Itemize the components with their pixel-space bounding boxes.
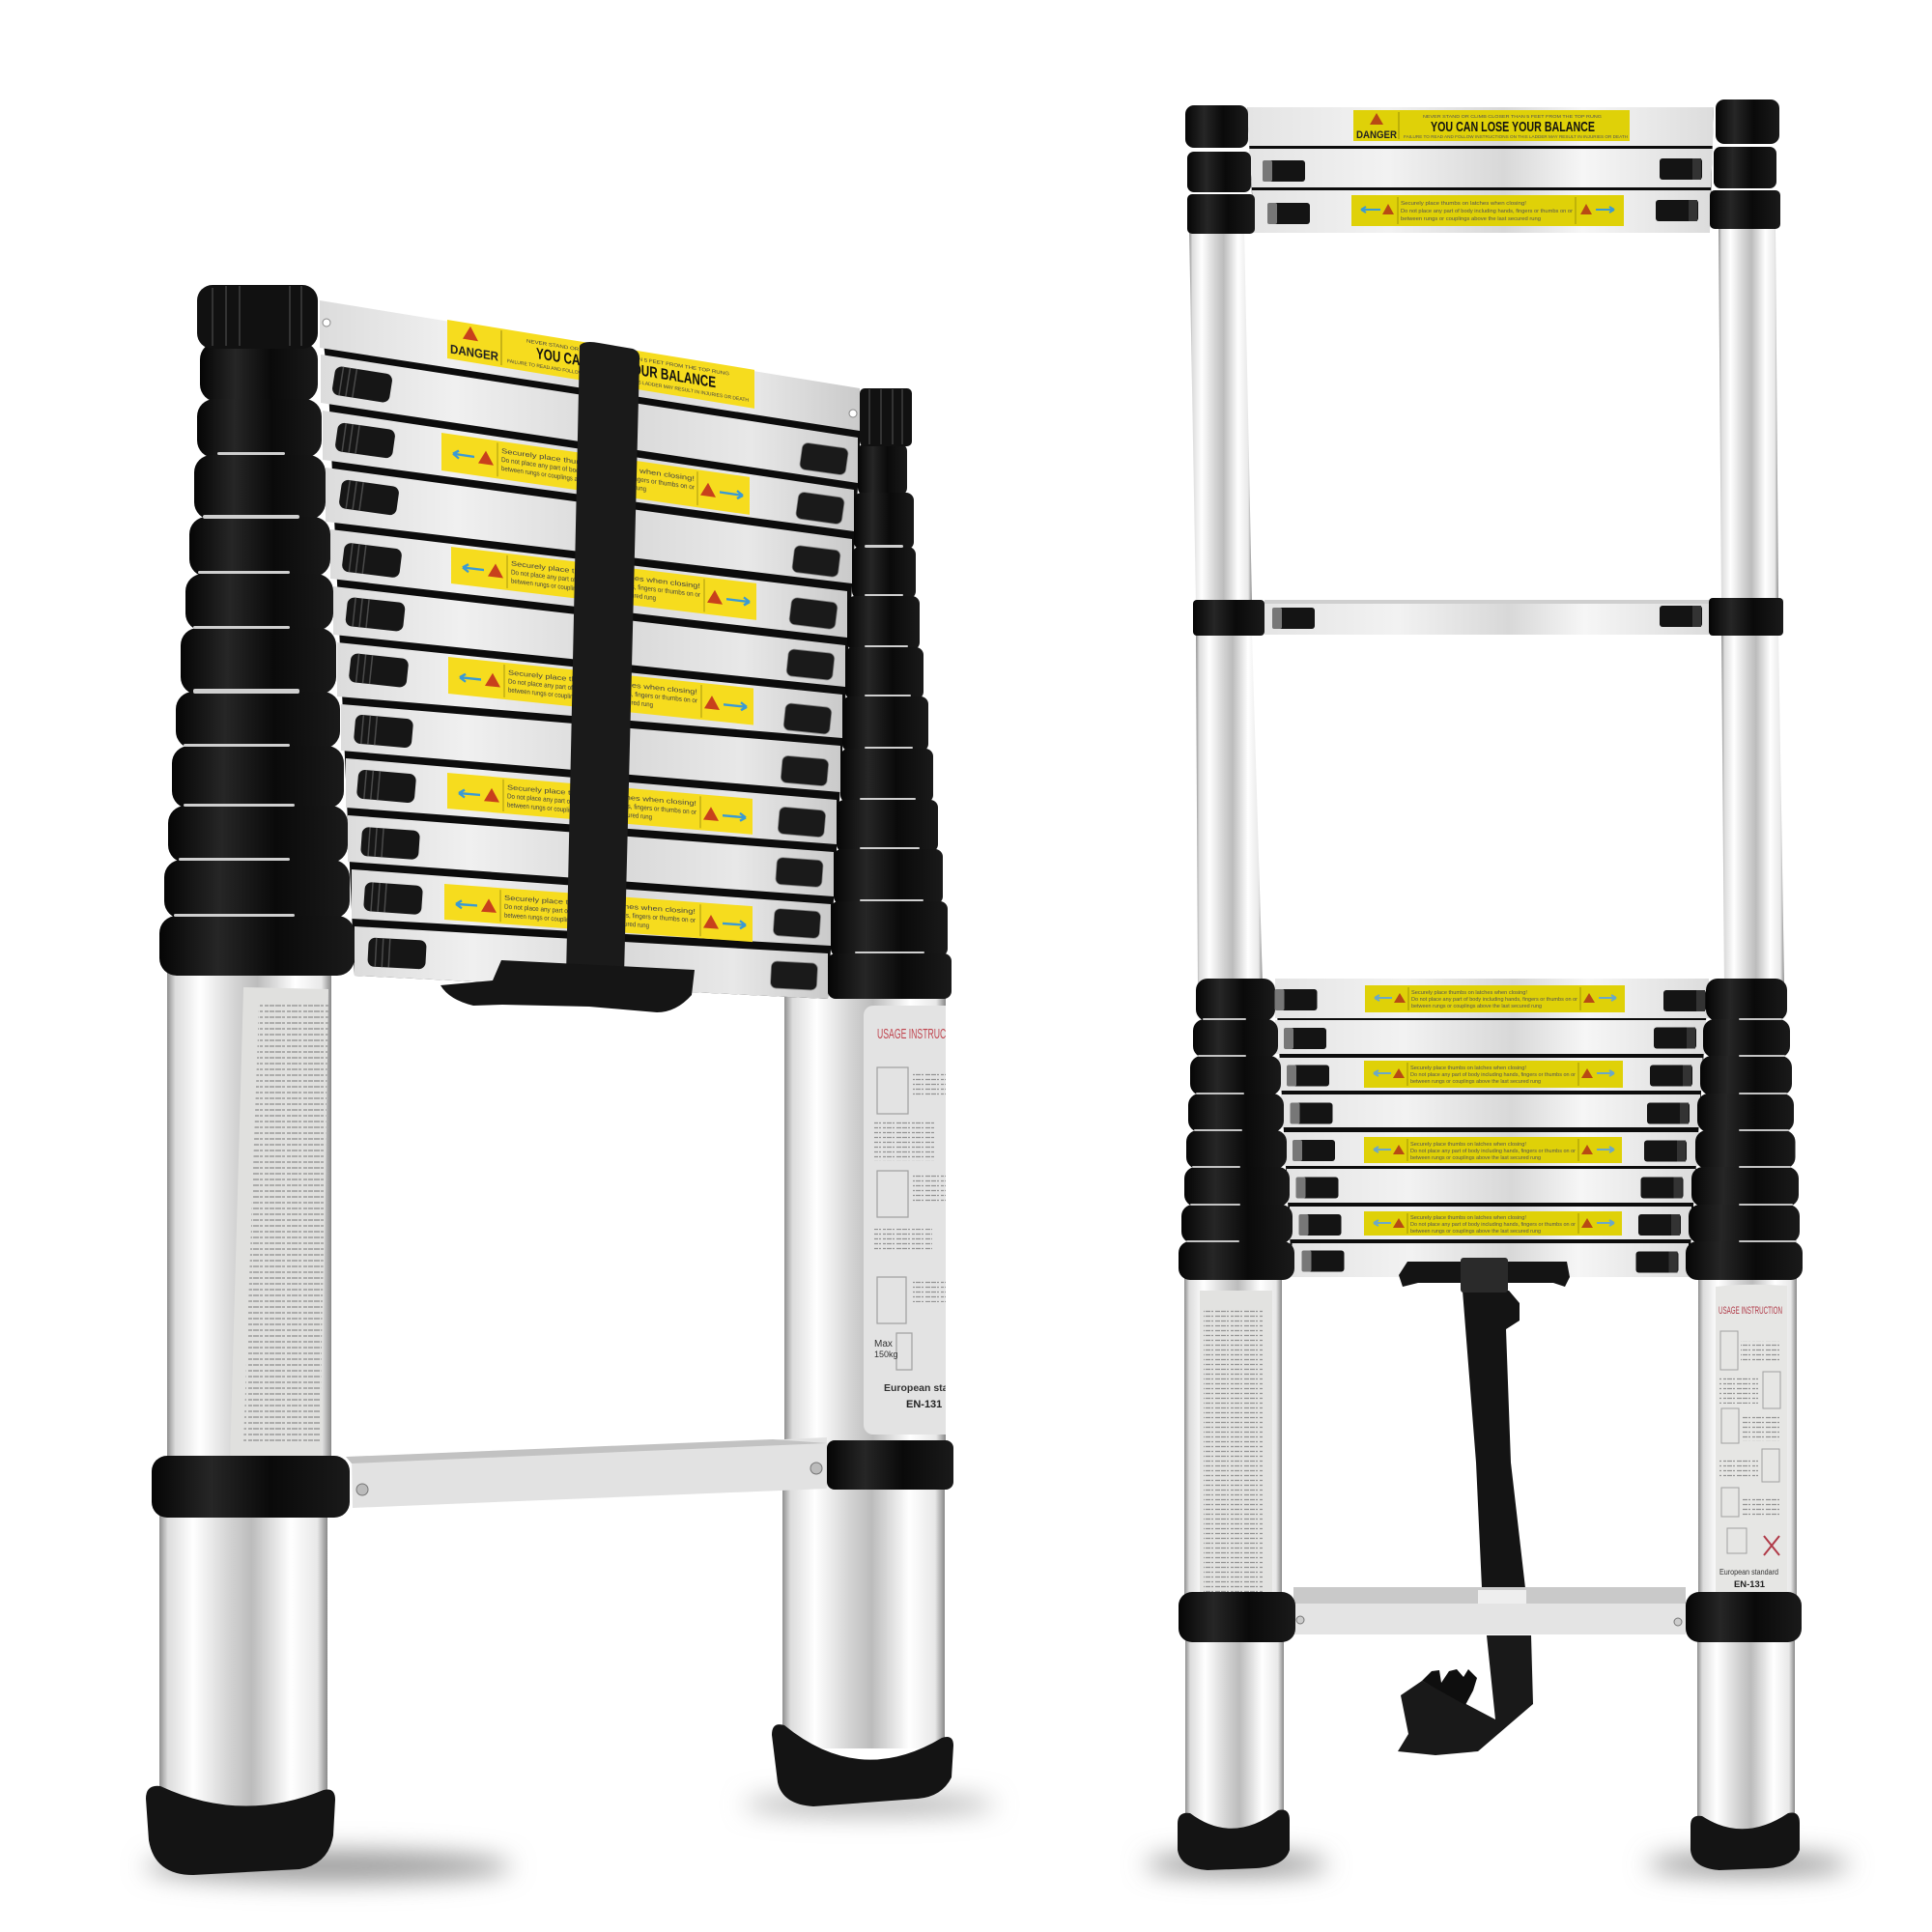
- left ladder: danger label: NEVER STAND OR CLIMB CLOSER THAN 5 FEET FROM THE TOP RUNG: [526, 338, 729, 378]
- left ladder: velcro strap: [566, 342, 639, 976]
- left ladder: caution label 2: between rungs or couplings above the last secured rung: [511, 578, 656, 602]
- right sticker small print: [1719, 1341, 1779, 1517]
- left ladder: left collars: [159, 342, 355, 976]
- left ladder: danger label: [447, 320, 754, 409]
- left ladder: caution label 5: Do not place any part of body including hands, fingers or thumbs on or: [504, 904, 696, 924]
- right ladder: lower stack rungs: [1275, 979, 1709, 1277]
- left ladder: caution label 5: [444, 884, 753, 942]
- right ladder: danger label: NEVER STAND OR CLIMB CLOSER THAN 5 FEET FROM THE TOP RUNG: [1423, 114, 1603, 119]
- right ladder: top collars: [1185, 99, 1780, 234]
- right ladder: lower stack right collars: [1686, 979, 1803, 1280]
- right ladder: lower caution label 4: between rungs or couplings above the last secured rung: [1410, 1229, 1541, 1235]
- right ladder: top caution label: Securely place thumbs on latches when closing!: [1401, 201, 1527, 207]
- sticker standard: European standard: [884, 1382, 977, 1394]
- right ladder: top stack backing: [1247, 107, 1714, 229]
- right sticker standard: European standard: [1719, 1568, 1778, 1577]
- left ladder: caution label 5: Securely place thumbs on latches when closing!: [504, 895, 696, 916]
- right ladder: lower caution label 2: [1364, 1061, 1623, 1088]
- left ladder: danger label: DANGER: [450, 342, 498, 364]
- right ladder: lower caution label 1: Do not place any part of body including hands, fingers or thumbs on or: [1411, 997, 1577, 1003]
- left ladder: carry handle: [440, 960, 695, 1012]
- right ladder: lower stack left collars: [1179, 979, 1294, 1280]
- right ladder: lower caution label 1: Securely place thumbs on latches when closing!: [1411, 990, 1527, 996]
- left ladder: caution label 2: [451, 547, 756, 620]
- right ladder: top caution label: [1351, 195, 1624, 226]
- left ladder: caution label 1: Do not place any part of body including hands, fingers or thumbs on or: [501, 457, 696, 492]
- right ladder: lower caution label 3: between rungs or couplings above the last secured rung: [1410, 1155, 1541, 1161]
- right ladder: lower caution label 3: Securely place thumbs on latches when closing!: [1410, 1142, 1526, 1148]
- right sticker standard number: EN-131: [1734, 1579, 1765, 1589]
- left ladder: top rung screws: [323, 319, 857, 417]
- floor shadows: [145, 1795, 1850, 1882]
- right sticker diagrams: [1720, 1331, 1780, 1553]
- right ladder: lower caution label 2: Do not place any part of body including hands, fingers or thumbs on or: [1410, 1072, 1576, 1078]
- sticker max load value: 150kg: [874, 1350, 898, 1359]
- right ladder: strap buckle: [1422, 1669, 1477, 1705]
- right ladder: feet: [1178, 1809, 1800, 1870]
- right ladder: lower tubes: [1184, 1270, 1797, 1831]
- left ladder: lower collars: [152, 1440, 953, 1518]
- right ladder: strap lower section and fold: [1398, 1635, 1533, 1755]
- left ladder: lower step: [346, 1437, 827, 1508]
- right ladder: lower caution label 2: between rungs or couplings above the last secured rung: [1410, 1079, 1541, 1085]
- right ladder: danger label: [1353, 110, 1630, 141]
- left ladder: feet: [146, 1724, 953, 1875]
- left ladder: usage instruction sticker: [864, 1006, 946, 1435]
- right ladder: lower caution label 4: Securely place thumbs on latches when closing!: [1410, 1215, 1526, 1221]
- left ladder: caution label 2: Do not place any part of body including hands, fingers or thumbs on or: [511, 569, 701, 599]
- left ladder: caution label 2: Securely place thumbs on latches when closing!: [511, 560, 700, 590]
- right ladder: lower stack collar highlights: [1186, 1018, 1797, 1242]
- right ladder: right tube sticker: [1716, 1285, 1787, 1603]
- left ladder: right tube: [782, 985, 946, 1748]
- right ladder: strap upper section: [1463, 1291, 1525, 1588]
- left ladder: caution label 3: Do not place any part of body including hands, fingers or thumbs on or: [508, 678, 698, 705]
- right sticker heading: USAGE INSTRUCTION: [1719, 1305, 1782, 1317]
- right ladder: lower caution label 4: [1364, 1211, 1622, 1236]
- left ladder: left latches: [331, 365, 427, 970]
- left ladder: rungs: [320, 300, 860, 999]
- left ladder: caution label 5: between rungs or couplings above the last secured rung: [504, 913, 649, 929]
- right ladder: lower stack right latches: [1636, 990, 1706, 1273]
- right ladder: carry handle with velcro: [1399, 1258, 1570, 1293]
- right ladder: bottom step: [1293, 1587, 1686, 1634]
- right ladder: top latches left: [1263, 160, 1310, 224]
- left ladder: caution label 3: Securely place thumbs on latches when closing!: [508, 669, 697, 696]
- sticker small print: [874, 1072, 946, 1302]
- left ladder: left tube instruction sticker: [230, 987, 328, 1462]
- right ladder: danger label: FAILURE TO READ AND FOLLOW INSTRUCTIONS ON THIS LADDER MAY RESULT IN INJURIES OR DEATH: [1404, 134, 1628, 139]
- right ladder: lower caution label 1: [1365, 985, 1625, 1012]
- left ladder: top end caps: [197, 285, 912, 446]
- right ladder: lower stack backing: [1275, 979, 1709, 1277]
- left ladder: caution label 3: [448, 657, 753, 725]
- sticker max load: Max: [874, 1339, 893, 1350]
- right ladder: danger label: DANGER: [1356, 129, 1397, 141]
- right ladder: bottom collars: [1179, 1592, 1802, 1642]
- left ladder: caution label 4: Do not place any part of body including hands, fingers or thumbs on or: [507, 793, 697, 816]
- left ladder: caution label 4: between rungs or couplings above the last secured rung: [507, 802, 652, 821]
- right ladder: top caution label: between rungs or couplings above the last secured rung: [1401, 216, 1541, 222]
- left ladder: danger label: YOU CAN LOSE YOUR BALANCE: [536, 345, 716, 391]
- right ladder: top latches right: [1656, 158, 1702, 221]
- left ladder: right collars: [828, 443, 952, 999]
- right ladder (extended, front view): [1178, 99, 1803, 1870]
- right ladder: lower stack left latches: [1275, 989, 1345, 1271]
- left ladder: danger label: FAILURE TO READ AND FOLLOW INSTRUCTIONS ON THIS LADDER MAY RESULT IN INJURIES OR DEATH: [507, 358, 749, 404]
- right ladder: lower caution label 2: Securely place thumbs on latches when closing!: [1410, 1065, 1526, 1071]
- left ladder: dark stack backing: [320, 309, 860, 999]
- right ladder: top rungs: [1247, 107, 1714, 233]
- sticker heading: USAGE INSTRUCTION: [877, 1026, 966, 1042]
- right ladder: lower caution label 3: [1364, 1137, 1622, 1163]
- right ladder: top caution label: Do not place any part of body including hands, fingers or thumbs on or: [1401, 209, 1573, 214]
- left ladder: right collar highlights: [855, 545, 924, 953]
- left ladder (collapsed, angled view): [146, 285, 977, 1875]
- sticker standard number: EN-131: [906, 1399, 942, 1410]
- left ladder: caution label 4: Securely place thumbs on latches when closing!: [507, 784, 696, 808]
- left ladder: left collar highlights: [174, 452, 299, 917]
- right ladder: upper tubes: [1189, 227, 1784, 985]
- right ladder: left tube sticker: [1200, 1291, 1272, 1603]
- left ladder: left tube: [159, 966, 331, 1811]
- right ladder: lower caution label 1: between rungs or couplings above the last secured rung: [1411, 1004, 1542, 1009]
- right ladder: lower caution label 3: Do not place any part of body including hands, fingers or thumbs on or: [1410, 1149, 1576, 1154]
- right sticker warning cross: [1764, 1536, 1779, 1555]
- sticker diagrams: [877, 1067, 912, 1370]
- left ladder: caution label 4: [447, 773, 753, 835]
- left ladder: caution label 1: Securely place thumbs on latches when closing!: [501, 448, 695, 483]
- right ladder: middle collars: [1193, 598, 1783, 636]
- left ladder: caution label 3: between rungs or couplings above the last secured rung: [508, 687, 653, 709]
- left ladder: caution label 1: [441, 433, 750, 515]
- right ladder: danger label: YOU CAN LOSE YOUR BALANCE: [1431, 119, 1595, 135]
- right ladder: lower caution label 4: Do not place any part of body including hands, fingers or thumbs on or: [1410, 1222, 1576, 1228]
- right ladder: middle rung: [1264, 600, 1709, 635]
- left ladder: caution label 1: between rungs or couplings above the last secured rung: [501, 466, 646, 494]
- left ladder: right latches: [770, 442, 849, 990]
